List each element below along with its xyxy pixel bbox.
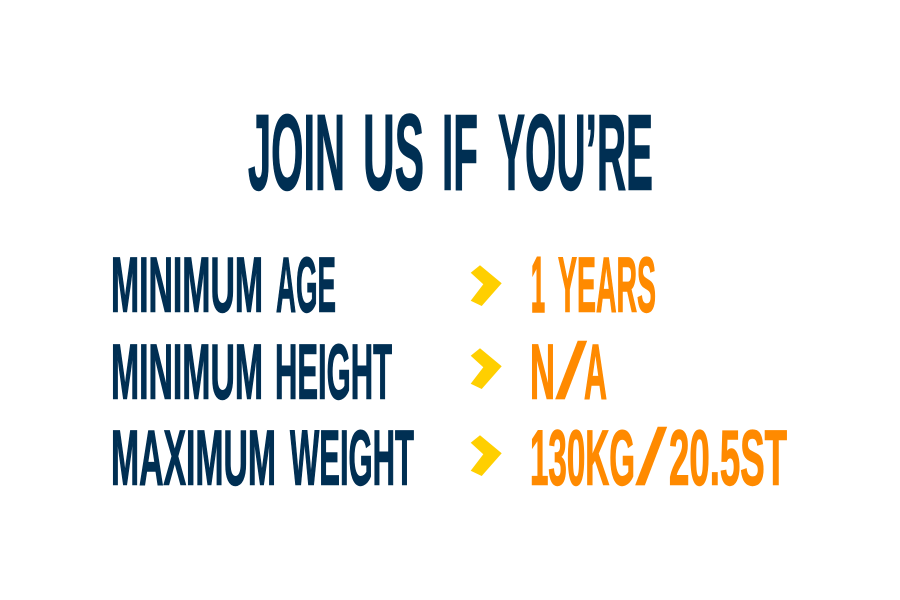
- value: 1 years: [531, 240, 656, 328]
- label: minimum age: MINIMUM: [111, 240, 263, 328]
- value: 130kg/20.5st: 130KG: [530, 414, 635, 502]
- icon: chevron row 3: [471, 435, 502, 476]
- value: n/a: /: [552, 327, 590, 414]
- label: minimum age: [111, 240, 336, 328]
- text: WEIGHT: [290, 414, 414, 502]
- label: maximum weight: MAXIMUM: [111, 414, 276, 502]
- value: n/a: N: [530, 328, 555, 416]
- icon: chevron row 2: [471, 348, 502, 389]
- icon: chevron row 1: [471, 265, 502, 306]
- title: JOIN: [248, 92, 345, 212]
- title: IF: [442, 92, 478, 212]
- text: AGE: [276, 240, 336, 328]
- text: A: [584, 328, 607, 416]
- text: YOU’RE: [498, 92, 653, 212]
- value: 130kg/20.5st: /: [632, 413, 670, 500]
- value: 1 years: 1: [531, 240, 545, 328]
- label: minimum height: MINIMUM: [111, 328, 263, 416]
- title: [248, 92, 653, 212]
- text: YEARS: [558, 240, 656, 328]
- title: US: [363, 92, 424, 212]
- text: HEIGHT: [275, 328, 392, 416]
